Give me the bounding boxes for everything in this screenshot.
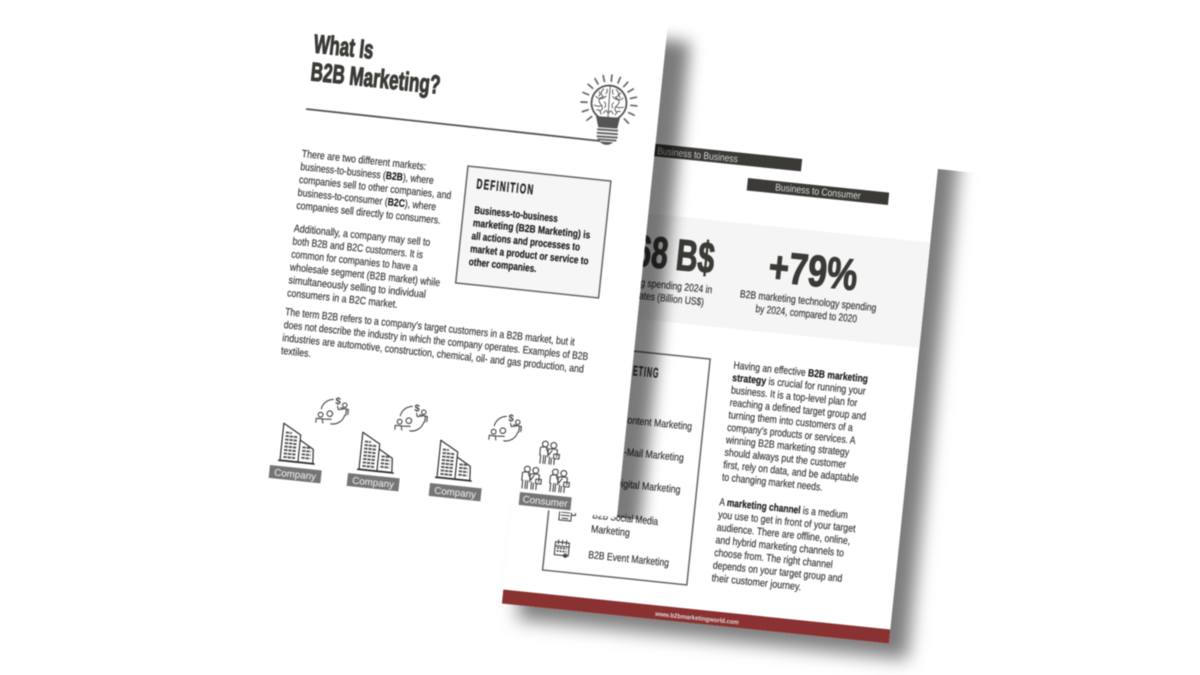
list item: content marketing: B2B Content Marketing	[602, 412, 693, 433]
text block: marketing channel	[711, 496, 857, 598]
label: company 1	[269, 465, 322, 483]
icon: building 1	[278, 423, 319, 464]
back page	[502, 128, 938, 643]
text block: marketing strategy: first, rely on data, and be adaptable	[723, 459, 859, 485]
panel: definition	[456, 166, 611, 298]
paragraph: two markets: business-to-business (B2B), where	[300, 161, 434, 187]
definition text	[468, 204, 594, 281]
paragraph: both markets: both B2B and B2C customers. It is	[292, 236, 424, 261]
list item: event marketing: B2B Event Marketing	[588, 549, 670, 569]
text block: marketing strategy: should always put the customer	[724, 447, 847, 471]
text block: marketing strategy: to changing market needs.	[721, 471, 823, 494]
paragraph: both markets: consumers in a B2C market.	[287, 287, 398, 311]
list item: social media marketing	[590, 509, 659, 542]
paragraph: both markets: common for companies to have a	[291, 248, 418, 274]
icon: light bulb with brain	[578, 73, 639, 147]
paragraph: term B2B	[280, 306, 590, 389]
bar: Business to Consumer: Business to Consumer	[775, 182, 862, 202]
label: company 3: Company	[434, 486, 477, 501]
paragraph: two markets: companies sell directly to consumers.	[296, 200, 441, 227]
text block: marketing strategy	[721, 359, 871, 497]
panel: marketing channels list	[543, 344, 710, 585]
list item: e-mail marketing: B2B E-Mail Marketing	[599, 444, 684, 464]
label: consumer: Consumer	[522, 494, 569, 510]
list item: digital marketing: B2B Digital Marketing	[595, 476, 681, 496]
title: What Is	[312, 29, 375, 65]
paragraph: term B2B: industries are automotive, construction, chemical, oil- and gas production, and	[282, 332, 585, 376]
stat: spending in billions: United States (Billion US$)	[604, 286, 705, 309]
front page	[219, 0, 667, 517]
front page shadow	[616, 29, 700, 521]
stat: +79% technology spending: B2B marketing technology spending	[739, 288, 877, 314]
back page shadow	[517, 100, 961, 659]
body text and definition	[280, 148, 611, 389]
text block: marketing strategy: reaching a defined target group and	[729, 397, 867, 423]
paragraph: two markets: business-to-consumer (B2C), where	[297, 187, 437, 213]
icon: exchange 3	[489, 411, 523, 443]
icon: exchange 2	[395, 401, 429, 433]
title: B2B Marketing?	[309, 56, 442, 100]
label: company 3	[429, 483, 482, 501]
infographic canvas	[268, 29, 971, 672]
text block: marketing channel: and hybrid marketing channels to	[715, 534, 845, 559]
text block: marketing strategy: company's products or services. A	[727, 422, 857, 447]
label: company 1: Company	[274, 468, 317, 483]
paragraph: term B2B: does not describe the industry in which the company operates. Examples of B2B	[283, 319, 589, 363]
paragraph: both markets: Additionally, a company may sell to	[293, 223, 431, 249]
definition text: all actions and processes to	[471, 230, 581, 254]
text block: marketing strategy: strategy is crucial for running your	[732, 372, 867, 398]
definition text: market a product or service to	[470, 243, 590, 268]
text block: marketing channel: A marketing channel is a medium	[719, 496, 849, 522]
text block: marketing channel: you use to get in front of your target	[718, 509, 856, 535]
bar: Business to Business: Business to Business	[657, 146, 738, 165]
paragraph: both markets: simultaneously selling to individual	[288, 274, 426, 301]
label: company 2	[347, 473, 400, 491]
definition text: other companies.	[468, 256, 537, 275]
paragraph: both markets: wholesale segment (B2B market) while	[288, 261, 441, 289]
list item: social media marketing: B2B Social Media	[592, 509, 659, 528]
label: company 2: Company	[352, 476, 395, 491]
list heading: MARKETING	[607, 360, 660, 381]
icon: building 2	[357, 432, 398, 473]
stats band	[532, 203, 930, 348]
footer band with URL: www.b2bmarketingworld.com	[654, 611, 739, 626]
text block: marketing strategy: business. It is a top-level plan for	[730, 384, 858, 409]
paragraph: term B2B: textiles.	[280, 345, 312, 360]
bar: Business to Consumer	[747, 178, 889, 205]
icon: consumers	[521, 441, 571, 493]
icon: event calendar	[554, 540, 570, 558]
stat: +79% technology spending: by 2024, compared to 2020	[755, 303, 858, 325]
paragraph: term B2B: The term B2B refers to a company’s target customers in a B2B market, but it	[285, 306, 575, 349]
text block: marketing strategy: winning B2B marketing strategy	[724, 434, 850, 459]
icon: exchange 1	[316, 394, 350, 426]
stat: spending in billions	[604, 224, 718, 309]
text block: marketing channel: depends on your target group and	[712, 560, 843, 585]
stat: +79% technology spending: +79%	[766, 242, 860, 300]
footer band with URL	[502, 590, 890, 643]
icon: building 3	[435, 440, 476, 481]
title	[309, 29, 445, 100]
definition heading: DEFINITION	[476, 176, 535, 197]
text block: marketing channel: audience. There are offline, online,	[716, 522, 851, 547]
text block: marketing strategy: turning them into customers of a	[728, 409, 854, 434]
paragraph: two markets: There are two different markets:	[301, 148, 427, 173]
paragraph: both markets	[286, 223, 445, 315]
definition text: Business-to-business	[474, 204, 559, 225]
icon: social media	[559, 508, 576, 522]
stat: spending in billions: marketing spending 2024 in	[607, 274, 713, 296]
stat: spending in billions: 68 B$	[632, 226, 717, 283]
diagram: company to company to consumer	[269, 394, 572, 510]
definition text: marketing (B2B Marketing) is	[472, 217, 591, 242]
paragraph: two markets	[296, 148, 455, 228]
bar: Business to Business	[549, 133, 802, 172]
text block: marketing channel: their customer journey.	[711, 572, 802, 593]
stat: +79% technology spending	[738, 240, 882, 327]
divider line	[306, 109, 600, 141]
paragraph: two markets: companies sell to other companies, and	[298, 174, 452, 202]
text block: marketing channel: choose from. The right channel	[714, 547, 833, 571]
text block: marketing strategy: Having an effective B2B marketing	[733, 360, 869, 385]
list item: social media marketing: Marketing	[590, 523, 631, 539]
